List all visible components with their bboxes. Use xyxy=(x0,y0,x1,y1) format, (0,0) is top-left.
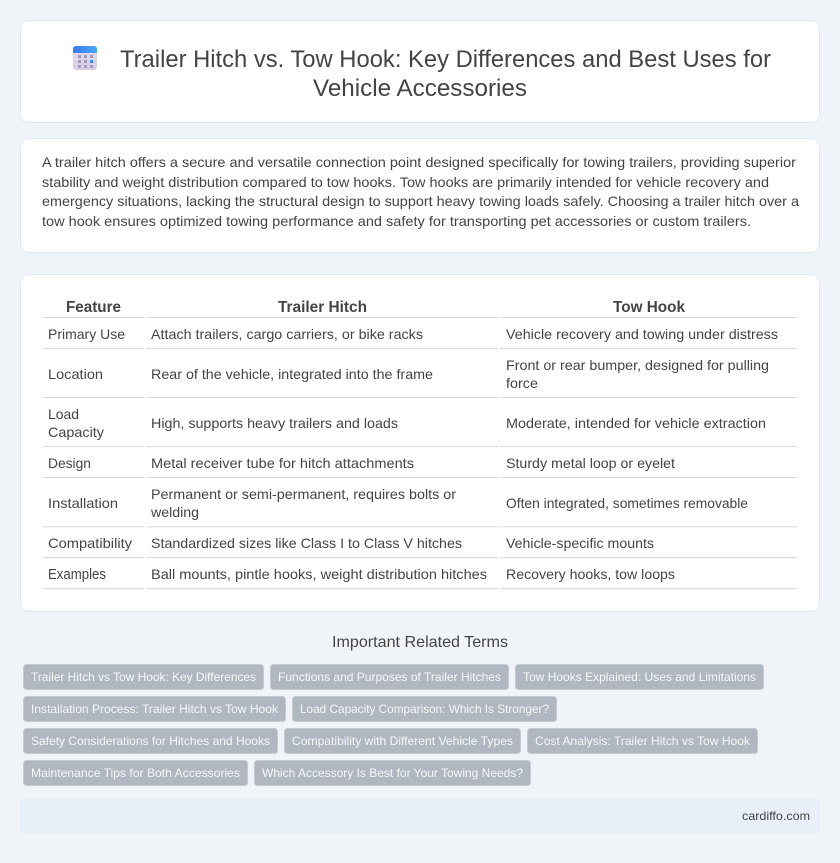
row: design: Design xyxy=(48,455,91,471)
row: design: Sturdy metal loop or eyelet xyxy=(506,455,675,471)
row: installation: Installation xyxy=(48,495,118,511)
tag: Which Accessory Is Best for Your Towing Needs? xyxy=(262,766,523,780)
tag: Tow Hooks Explained: Uses and Limitations xyxy=(523,670,756,684)
tag xyxy=(24,760,248,786)
table header: Tow Hook xyxy=(613,299,685,316)
title: Vehicle Accessories xyxy=(313,75,527,102)
table header: Trailer Hitch xyxy=(278,299,367,316)
tag xyxy=(292,696,556,722)
panel: summary paragraph: A trailer hitch offers a secure and versatile connection point designed specifically for towing trailers, providing superior xyxy=(42,154,796,170)
footer: cardiffo.com xyxy=(742,809,810,823)
row: load capacity: Moderate, intended for vehicle extraction xyxy=(506,415,766,431)
row: compatibility xyxy=(48,535,654,551)
tag xyxy=(254,760,530,786)
row: location: force xyxy=(506,375,538,391)
tag: Compatibility with Different Vehicle Types xyxy=(292,734,513,748)
tag: Safety Considerations for Hitches and Hooks xyxy=(31,734,270,748)
panel: summary paragraph: stability and weight distribution compared to tow hooks. Tow hooks are primarily intended for vehicle recovery and xyxy=(42,174,769,190)
row: primary use: Primary Use xyxy=(48,326,125,342)
tag xyxy=(270,664,508,690)
tag xyxy=(24,696,286,722)
row: load capacity: Load xyxy=(48,406,79,422)
table header: Feature xyxy=(66,299,121,316)
row: examples xyxy=(48,566,675,583)
row: compatibility: Vehicle-specific mounts xyxy=(506,535,654,551)
title xyxy=(120,46,771,102)
row: installation: Permanent or semi-permanent, requires bolts or xyxy=(151,486,456,502)
tag: Maintenance Tips for Both Accessories xyxy=(31,766,240,780)
panel: header xyxy=(20,20,820,122)
tag xyxy=(24,728,278,754)
row: design xyxy=(48,455,675,471)
tag xyxy=(284,728,520,754)
row: location: Rear of the vehicle, integrated into the frame xyxy=(151,366,433,382)
panel: comparison table xyxy=(20,274,820,612)
row: location: Front or rear bumper, designed for pulling xyxy=(506,357,769,373)
row: compatibility: Compatibility xyxy=(48,535,132,551)
heading: important related terms: Important Related Terms xyxy=(332,634,508,651)
tag: Cost Analysis: Trailer Hitch vs Tow Hook xyxy=(535,734,751,748)
row: installation: welding xyxy=(150,504,199,520)
row: load capacity: Capacity xyxy=(48,424,104,440)
row: compatibility: Standardized sizes like Class I to Class V hitches xyxy=(151,535,462,551)
tag: Trailer Hitch vs Tow Hook: Key Differences xyxy=(31,670,256,684)
row: load capacity: High, supports heavy trailers and loads xyxy=(151,415,398,431)
tag: Functions and Purposes of Trailer Hitches xyxy=(278,670,501,684)
icon: calendar grid xyxy=(73,46,97,70)
tag xyxy=(516,664,764,690)
row: examples: Examples xyxy=(48,567,106,583)
row: installation xyxy=(48,486,748,520)
tag: Load Capacity Comparison: Which Is Stronger? xyxy=(300,702,549,716)
row: location: Location xyxy=(48,366,103,382)
row: examples: Ball mounts, pintle hooks, weight distribution hitches xyxy=(151,566,487,582)
row: installation: Often integrated, sometimes removable xyxy=(506,495,748,511)
row: primary use: Attach trailers, cargo carriers, or bike racks xyxy=(151,326,423,342)
footer xyxy=(20,799,820,833)
tag cloud: related terms xyxy=(24,664,764,786)
row: primary use: Vehicle recovery and towing under distress xyxy=(506,326,778,342)
panel: summary paragraph: tow hook ensures optimized towing performance and safety for transporting pet accessories or custom trailers. xyxy=(42,213,751,229)
table header xyxy=(66,299,685,316)
row: primary use xyxy=(48,326,778,342)
tag xyxy=(528,728,758,754)
title: Trailer Hitch vs. Tow Hook: Key Differences and Best Uses for xyxy=(120,46,771,73)
tag: Installation Process: Trailer Hitch vs Tow Hook xyxy=(31,702,279,716)
row: examples: Recovery hooks, tow loops xyxy=(506,566,675,582)
tag xyxy=(24,664,264,690)
row: load capacity xyxy=(48,406,766,440)
row: design: Metal receiver tube for hitch attachments xyxy=(151,455,414,471)
row: location xyxy=(48,357,769,391)
panel: summary paragraph xyxy=(20,138,820,252)
panel: summary paragraph: emergency situations, lacking the structural design to support heavy towing loads safely. Choosing a trailer hitch over a xyxy=(42,193,799,209)
